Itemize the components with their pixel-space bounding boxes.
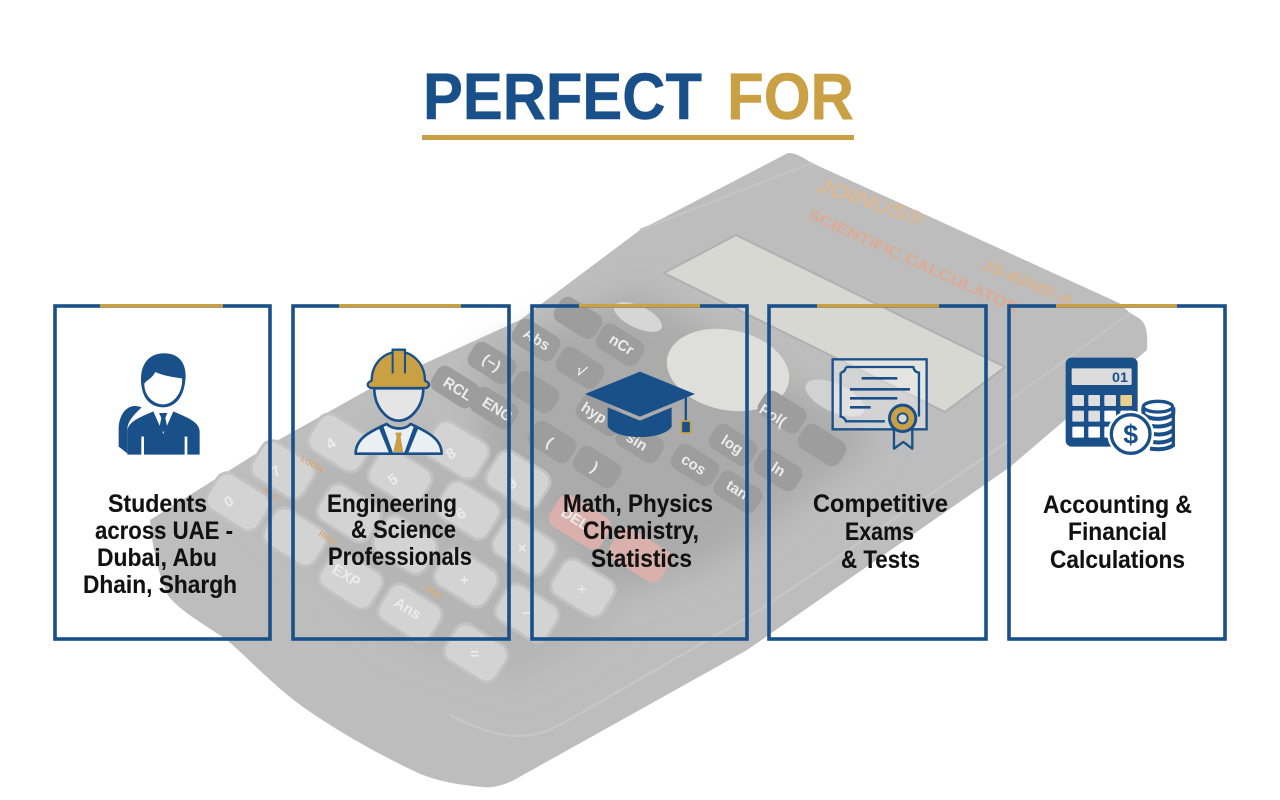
calculator key labels: hyp [578,399,610,428]
label: accounting: Accounting & [1043,491,1192,519]
calculator key labels: ) [588,459,601,476]
label: subjects [563,490,713,573]
label: students [83,490,237,599]
calculator key labels: 6 [453,505,469,523]
calculator key labels: 0 [221,493,237,511]
calculator key labels: 7 [268,463,284,481]
heading text: FOR [727,59,854,133]
calculator key labels: √ [573,362,590,381]
label: subjects: Statistics [591,545,692,573]
calculator key labels: log [718,432,746,458]
calculator key labels: = [470,646,479,663]
calculator brand text: SCIENTIFIC CALCULATOR [805,206,1022,317]
calculator key labels: DEL [558,504,592,534]
label: exams [813,490,948,574]
icon: calculator and coins [1066,358,1177,457]
calculator key labels: − [522,605,531,622]
icon: engineer [356,350,442,454]
calculator key labels: tan [723,477,751,503]
calculator key labels: EXP [329,561,363,591]
calculator key labels: 4 [323,434,340,453]
panel: exams [769,304,986,639]
icon: graduation cap [585,372,695,437]
label: exams: Exams [845,518,914,546]
icon: student [119,353,200,455]
label: engineering: Engineering [327,490,457,518]
calculator key labels: Ran# [317,529,339,547]
calculator display [664,235,1005,412]
background calculator photo [150,153,1147,787]
calculator key labels: cos [678,451,709,479]
calculator key labels: DRG [424,584,444,601]
icon: calculator and coins: $ [1123,420,1138,450]
label: subjects: Chemistry, [583,517,699,545]
title underline [422,135,854,140]
panel: subjects [532,304,747,639]
light number keys [201,409,620,687]
label: students: across UAE - [95,517,233,545]
calculator brand text: JOINUS® [813,174,928,232]
label: accounting: Financial [1068,518,1167,546]
calculator key labels: ( [543,434,556,451]
calculator key labels: ÷ [578,581,586,598]
dark function keys [427,293,850,517]
calculator key labels: Rnd [261,486,279,502]
calculator key labels: ln [768,459,788,480]
title [423,59,854,133]
icon: calculator and coins: 01 [1112,369,1128,385]
label: students: Dhain, Shargh [83,571,237,599]
calculator key labels: × [518,540,527,557]
panel: students [55,304,270,639]
label: engineering: & Science [351,516,456,544]
label: exams: Competitive [813,490,948,518]
calculator key labels: + [460,572,469,589]
calculator key labels: nCr [606,331,637,359]
calculator key labels: 5 [385,471,401,489]
calculator key labels: 8 [443,445,459,463]
calculator key labels: Ans [391,594,424,623]
calculator brand text: JS-82MS-A [978,256,1075,310]
label: exams: & Tests [841,546,920,574]
label: students: Dubai, Abu [97,544,217,572]
calculator key labels: (−) [479,351,504,375]
calculator key labels: LOGIN [299,454,325,475]
label: engineering: Professionals [328,543,472,571]
label: engineering [327,490,472,571]
label: accounting: Calculations [1050,546,1185,574]
heading text: PERFECT [423,59,702,133]
label: subjects: Math, Physics [563,490,713,518]
calculator key labels: ENG [479,394,515,426]
red keys [545,491,675,586]
icon: certificate [833,359,927,449]
panel: accounting [1009,304,1225,639]
label: students: Students [108,490,207,518]
navigation pad [659,318,797,422]
panel: engineering [293,304,509,639]
label: accounting [1043,491,1192,574]
calculator key labels: Abs [520,325,553,354]
calculator brand text [805,174,1075,317]
calculator key labels: Pol( [756,401,789,430]
calculator key labels [221,325,789,663]
calculator key labels: RCL [440,374,475,405]
calculator key labels: 9 [504,475,520,493]
calculator key labels: sin [623,429,650,455]
